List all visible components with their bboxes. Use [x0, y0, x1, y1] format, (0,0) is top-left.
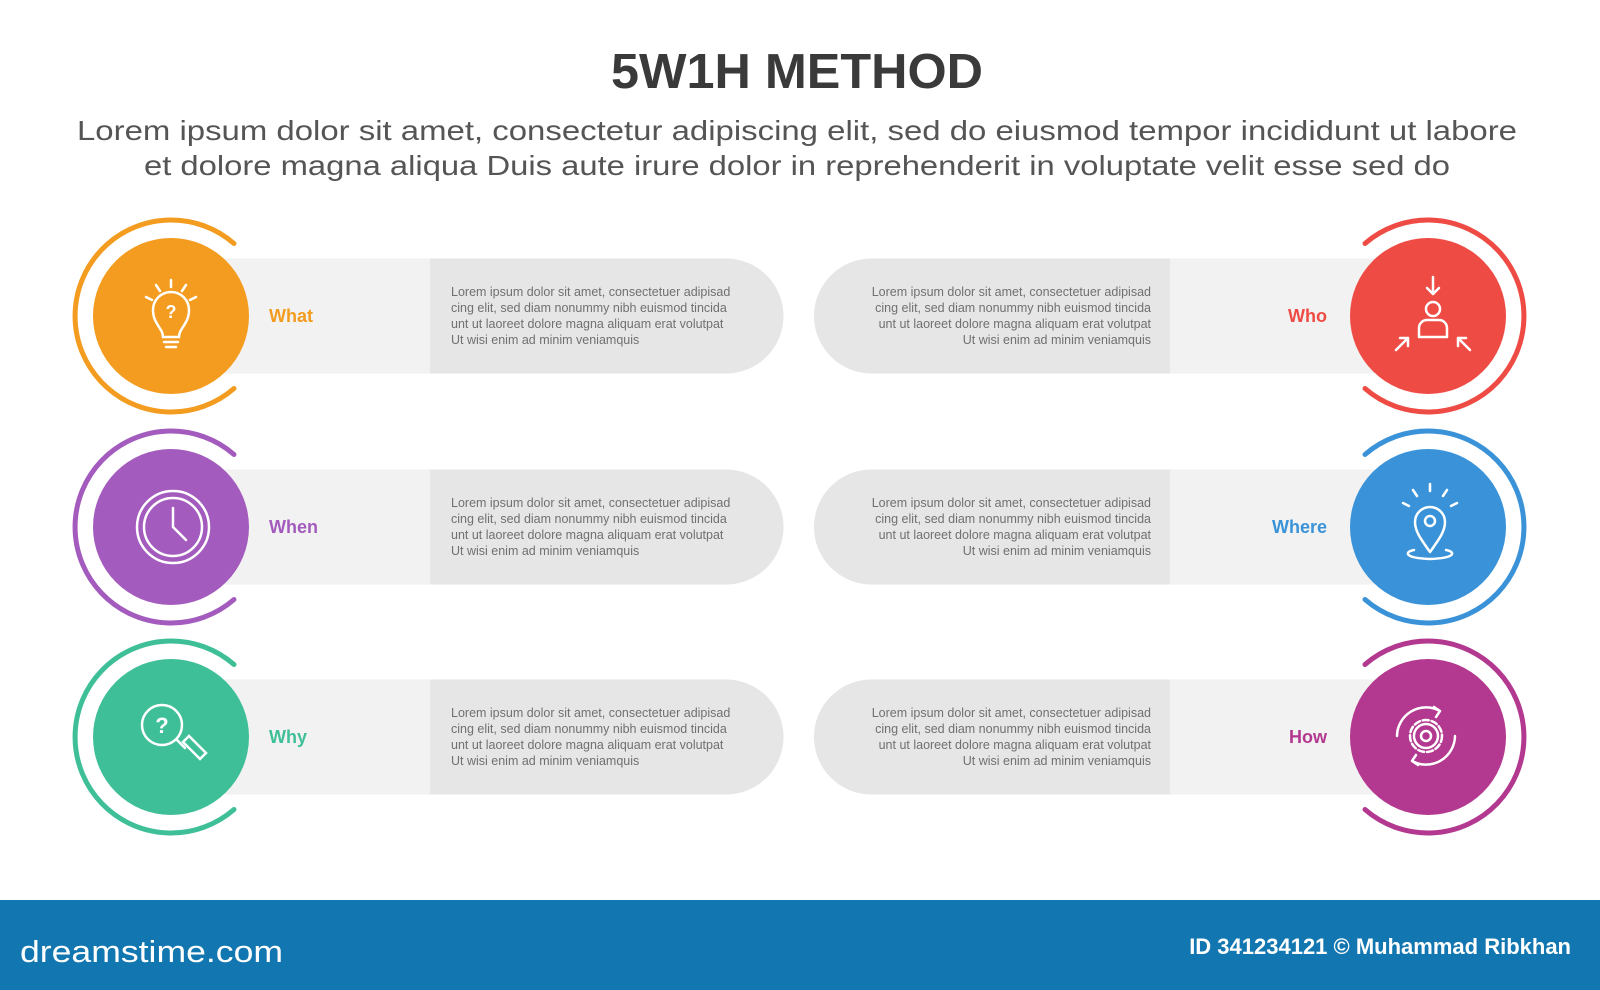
- title: 5W1H METHOD: [611, 45, 983, 99]
- panel: what: [75, 220, 783, 412]
- text block: what: cing elit, sed diam nonummy nibh euismod tincida: [451, 301, 727, 315]
- icon: location pin: [1403, 484, 1457, 559]
- text block: where: [872, 496, 1152, 558]
- label: how: How: [1289, 727, 1328, 747]
- text block: what: unt ut laoreet dolore magna aliquam erat volutpat: [451, 317, 724, 331]
- text block: where: Lorem ipsum dolor sit amet, consectetuer adipisad: [872, 496, 1151, 510]
- icon: magnifier: [142, 705, 206, 759]
- text block: when: unt ut laoreet dolore magna aliquam erat volutpat: [451, 528, 724, 542]
- label: what: What: [269, 306, 313, 326]
- icon: magnifier: ?: [155, 713, 169, 738]
- panel: where: [814, 431, 1524, 623]
- text block: who: Lorem ipsum dolor sit amet, consectetuer adipisad: [872, 285, 1151, 299]
- text block: why: unt ut laoreet dolore magna aliquam erat volutpat: [451, 738, 724, 752]
- text block: where: unt ut laoreet dolore magna aliquam erat volutpat: [879, 528, 1152, 542]
- text block: how: Ut wisi enim ad minim veniamquis: [963, 754, 1151, 768]
- text block: how: unt ut laoreet dolore magna aliquam erat volutpat: [879, 738, 1152, 752]
- icon: lightbulb: [146, 280, 196, 347]
- panel: who: [814, 220, 1524, 412]
- text block: when: [451, 496, 730, 558]
- panel: how: [814, 641, 1524, 833]
- text block: why: [451, 706, 730, 768]
- text block: how: Lorem ipsum dolor sit amet, consectetuer adipisad: [872, 706, 1151, 720]
- text block: why: Lorem ipsum dolor sit amet, consectetuer adipisad: [451, 706, 730, 720]
- label: who: Who: [1288, 306, 1327, 326]
- footer logo text: dreamstime.com: [20, 934, 283, 969]
- text block: what: [451, 285, 730, 347]
- subtitle: et dolore magna aliqua Duis aute irure dolor in reprehenderit in voluptate velit esse sed do: [144, 150, 1450, 181]
- text block: what: Ut wisi enim ad minim veniamquis: [451, 333, 639, 347]
- panel: why: [75, 641, 783, 833]
- label: where: Where: [1272, 517, 1327, 537]
- label: why: Why: [269, 727, 307, 747]
- text block: where: Ut wisi enim ad minim veniamquis: [963, 544, 1151, 558]
- text block: how: [872, 706, 1152, 768]
- text block: when: Lorem ipsum dolor sit amet, consectetuer adipisad: [451, 496, 730, 510]
- text block: why: Ut wisi enim ad minim veniamquis: [451, 754, 639, 768]
- footer credit: ID 341234121 © Muhammad Ribkhan: [1189, 934, 1571, 959]
- icon: lightbulb: ?: [166, 302, 176, 322]
- text block: how: cing elit, sed diam nonummy nibh euismod tincida: [875, 722, 1151, 736]
- text block: who: Ut wisi enim ad minim veniamquis: [963, 333, 1151, 347]
- text block: who: unt ut laoreet dolore magna aliquam erat volutpat: [879, 317, 1152, 331]
- icon: gear with arrows: [1397, 707, 1455, 765]
- text block: who: cing elit, sed diam nonummy nibh euismod tincida: [875, 301, 1151, 315]
- subtitle: [77, 115, 1517, 181]
- text block: why: cing elit, sed diam nonummy nibh euismod tincida: [451, 722, 727, 736]
- text block: who: [872, 285, 1152, 347]
- text block: what: Lorem ipsum dolor sit amet, consectetuer adipisad: [451, 285, 730, 299]
- icon: clock: [137, 491, 209, 563]
- text block: where: cing elit, sed diam nonummy nibh euismod tincida: [875, 512, 1151, 526]
- text block: when: Ut wisi enim ad minim veniamquis: [451, 544, 639, 558]
- panel: when: [75, 431, 783, 623]
- icon: person with arrows: [1396, 277, 1470, 350]
- label: when: When: [269, 517, 318, 537]
- subtitle: Lorem ipsum dolor sit amet, consectetur adipiscing elit, sed do eiusmod tempor incididunt ut labore: [77, 115, 1517, 146]
- footer bar: [0, 900, 1600, 990]
- text block: when: cing elit, sed diam nonummy nibh euismod tincida: [451, 512, 727, 526]
